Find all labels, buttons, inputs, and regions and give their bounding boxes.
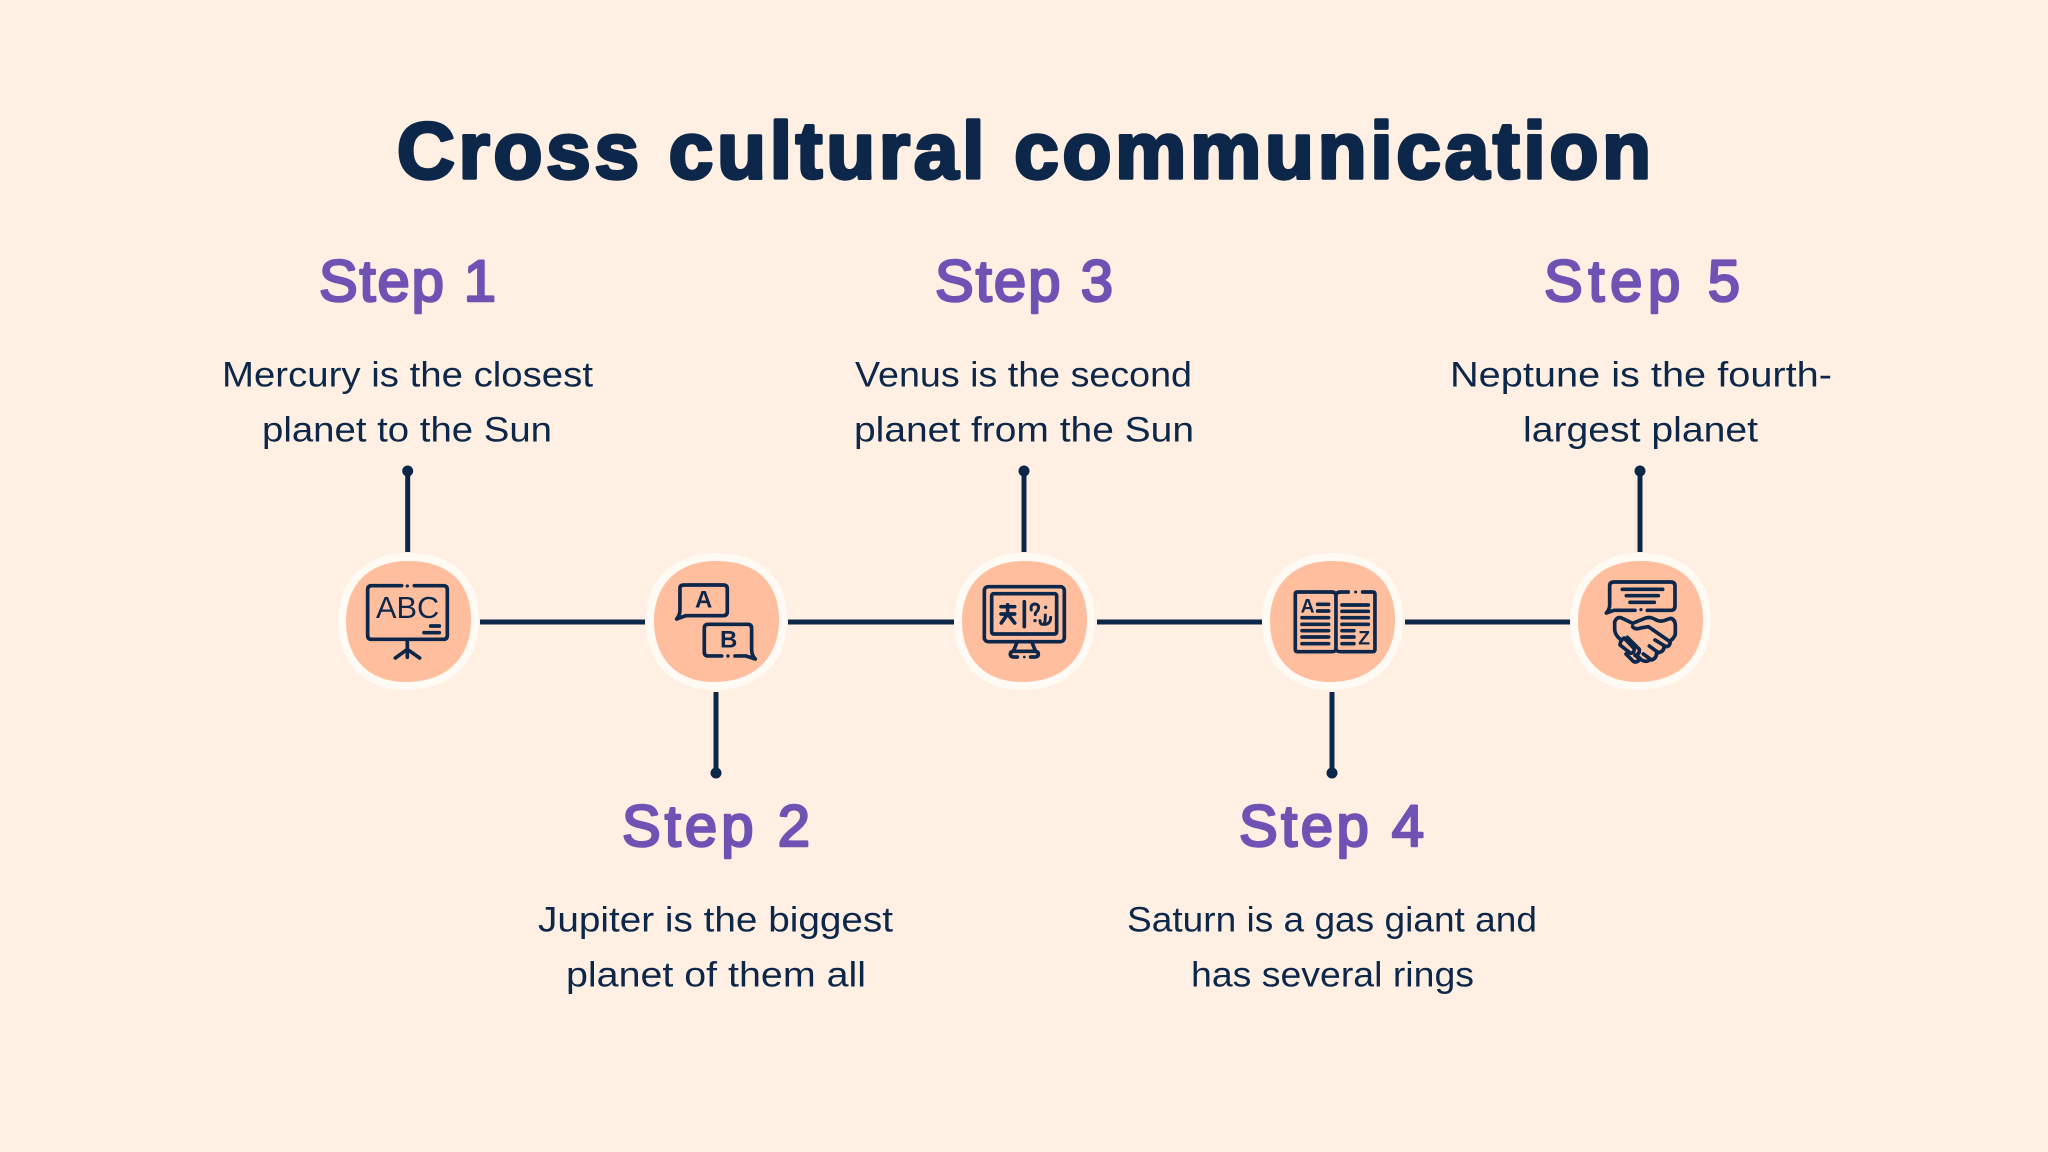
step 3 connector — [1018, 466, 1030, 552]
step 2 node — [654, 561, 779, 778]
icon: open dictionary book: A — [1301, 597, 1315, 618]
icon: A and B speech bubbles: A — [695, 587, 712, 614]
step 4 block — [1127, 794, 1537, 994]
title: Cross cultural communication — [397, 106, 1651, 195]
step 3 block — [854, 249, 1194, 552]
step 5 block — [1450, 249, 1832, 552]
step 3 node — [962, 561, 1087, 682]
step 5 node — [1578, 561, 1703, 682]
icon: A and B speech bubbles — [677, 585, 755, 659]
step 4 node — [1270, 561, 1395, 778]
step 5 connector — [1634, 466, 1646, 552]
step 5 description: largest planet — [1523, 410, 1758, 450]
step 1 description: planet to the Sun — [262, 410, 552, 450]
icon: open dictionary book — [1295, 590, 1375, 652]
timeline connectors — [480, 620, 1571, 624]
step 2 connector — [710, 692, 722, 778]
step 3 description — [854, 356, 1194, 450]
step 2 block — [538, 794, 893, 994]
step 4 description: has several rings — [1191, 956, 1474, 994]
step 1 node — [346, 561, 471, 682]
step 3 description: Venus is the second — [855, 356, 1192, 394]
icon: handshake with speech bubble — [1606, 582, 1675, 662]
step 4 heading: Step 4 — [1239, 794, 1424, 859]
step 1 description: Mercury is the closest — [222, 356, 593, 394]
step 4 connector — [1326, 692, 1338, 778]
step 3 description: planet from the Sun — [854, 410, 1194, 450]
step 4 description: Saturn is a gas giant and — [1127, 900, 1537, 940]
step 2 heading: Step 2 — [622, 794, 810, 859]
step 3 heading: Step 3 — [935, 249, 1113, 314]
icon: ABC presentation board: ABC — [376, 591, 439, 625]
icon: A and B speech bubbles: B — [720, 626, 737, 653]
step 2 description: Jupiter is the biggest — [538, 900, 893, 940]
icon: translation on computer monitor — [984, 587, 1064, 658]
step 1 heading: Step 1 — [319, 249, 496, 314]
step 1 connector — [402, 466, 413, 552]
step 2 description — [538, 900, 893, 994]
icon: open dictionary book: Z — [1358, 629, 1370, 650]
step 5 description — [1450, 356, 1832, 450]
step 1 block — [222, 249, 593, 552]
step 5 description: Neptune is the fourth- — [1450, 356, 1832, 394]
step 2 description: planet of them all — [566, 956, 866, 994]
step 1 description — [222, 356, 593, 450]
step 5 heading: Step 5 — [1544, 249, 1740, 314]
step 4 description — [1127, 900, 1537, 994]
